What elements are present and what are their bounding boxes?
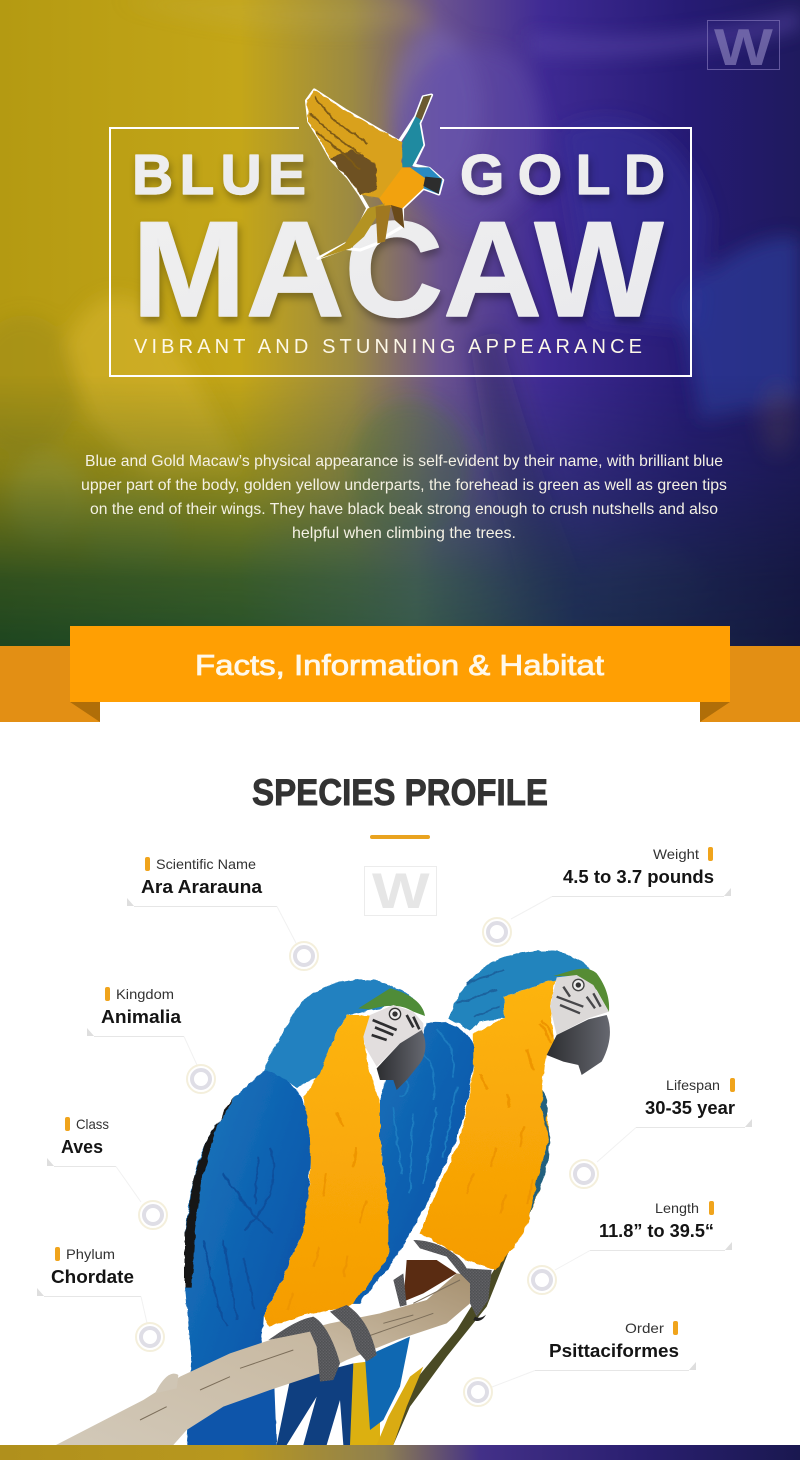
ribbon banner	[0, 626, 800, 722]
intro paragraph	[81, 453, 727, 542]
brown patch between legs	[403, 1260, 457, 1302]
left macaw head and mantle	[263, 979, 413, 1087]
heading underline	[370, 835, 430, 839]
bottom gradient strip	[0, 1445, 800, 1460]
right macaw neck feather marks	[457, 970, 503, 1017]
callout: class: Aves	[61, 1136, 103, 1157]
right macaw body	[420, 980, 555, 1270]
hero panel background	[0, 0, 800, 646]
left macaw yellow feather marks	[287, 1113, 367, 1310]
heading: species profile: SPECIES PROFILE	[252, 771, 548, 813]
title: BLUE GOLD MACAW: BLUE	[132, 143, 306, 207]
macaw feet	[268, 1240, 492, 1382]
feathered bodies	[185, 950, 608, 1445]
callout: phylum: Chordate	[51, 1266, 134, 1287]
title: BLUE GOLD MACAW: GOLD	[460, 143, 665, 207]
lower tail feathers	[187, 1360, 353, 1445]
callout: length: 11.8” to 39.5“	[599, 1220, 714, 1241]
callout: class: Class	[76, 1116, 109, 1132]
right macaw crown	[553, 969, 609, 1012]
top watermark logo: W	[714, 19, 774, 77]
branch grain	[140, 1280, 460, 1420]
left macaw eye	[389, 1008, 401, 1020]
left macaw beak	[377, 1030, 425, 1090]
callout: kingdom: Animalia	[101, 1006, 182, 1027]
callout: order: Psittaciformes	[549, 1340, 679, 1361]
callout: phylum: Phylum	[66, 1246, 115, 1262]
right macaw eye	[573, 979, 584, 991]
left macaw face	[363, 1005, 423, 1067]
right claw	[473, 1315, 486, 1321]
title frame	[110, 128, 691, 376]
intro paragraph: on the end of their wings. They have black beak strong enough to crush nutshells and also	[90, 501, 718, 518]
callout: class	[47, 1116, 167, 1229]
callout: weight: Weight	[653, 846, 699, 862]
right macaw flank	[530, 1090, 550, 1215]
left macaw feather lines	[203, 1147, 273, 1327]
callout: scientific name	[127, 856, 318, 970]
callout: weight	[483, 846, 731, 946]
callout: phylum	[37, 1246, 164, 1351]
intro paragraph: Blue and Gold Macaw’s physical appearance is self-evident by their name, with brilliant blue	[85, 453, 723, 470]
right macaw head	[448, 950, 608, 1030]
right macaw wing	[347, 1022, 475, 1303]
callout: length	[528, 1200, 732, 1294]
center watermark logo: W	[372, 863, 430, 919]
callout: kingdom	[87, 986, 215, 1093]
left macaw wing	[185, 1072, 310, 1445]
right macaw face stripes	[557, 987, 601, 1013]
intro paragraph: helpful when climbing the trees.	[292, 525, 516, 542]
subtitle: VIBRANT AND STUNNING APPEARANCE	[134, 336, 642, 358]
right macaw wing feathers	[393, 1030, 457, 1193]
callout: length: Length	[655, 1200, 699, 1216]
branch	[56, 1273, 480, 1445]
right macaw face	[550, 975, 609, 1035]
intro paragraph: upper part of the body, golden yellow underparts, the forehead is green as well as green tips	[81, 477, 727, 494]
ribbon banner: Facts, Information & Habitat	[195, 650, 604, 682]
callout: kingdom: Kingdom	[116, 986, 174, 1002]
callout: lifespan: Lifespan	[666, 1077, 720, 1093]
callout: lifespan: 30-35 year	[645, 1097, 735, 1118]
callout: lifespan	[570, 1077, 752, 1188]
left macaw dark wing edge	[185, 1097, 235, 1287]
left macaw crown	[358, 988, 425, 1016]
right macaw tail	[347, 1240, 513, 1445]
callout: scientific name: Ara Ararauna	[141, 876, 263, 897]
callout: order: Order	[625, 1320, 664, 1336]
right macaw beak	[547, 1015, 610, 1075]
title: BLUE GOLD MACAW: MACAW	[132, 193, 664, 345]
left macaw body	[263, 1015, 388, 1327]
illustration: two macaws on a branch	[56, 950, 610, 1445]
callout: weight: 4.5 to 3.7 pounds	[563, 866, 714, 887]
icon: flying macaw	[307, 90, 443, 258]
callout: scientific name: Scientific Name	[156, 856, 256, 872]
right macaw yellow feather marks	[467, 1020, 553, 1213]
callout: order	[464, 1320, 696, 1406]
left macaw face stripes	[372, 1015, 419, 1040]
branch knot	[155, 1374, 178, 1393]
